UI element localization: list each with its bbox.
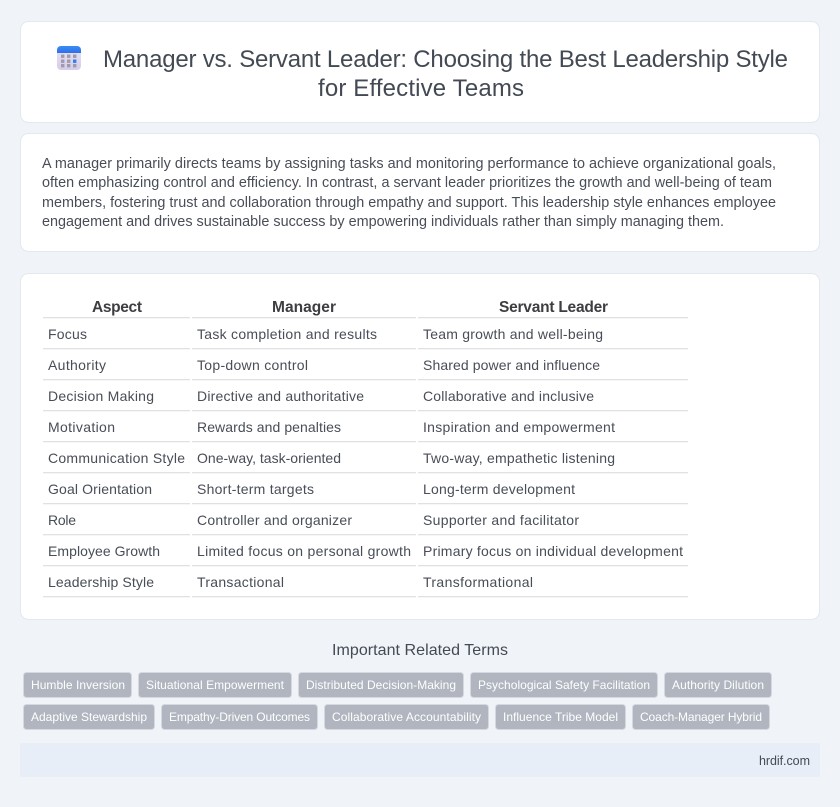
row: Leadership Style: [48, 574, 533, 590]
row: Goal Orientation: Short-term targets: [197, 481, 314, 497]
tags: related terms: [24, 672, 772, 730]
title: Manager vs. Servant Leader: Choosing the Best Leadership Style: [103, 46, 788, 73]
row: Goal Orientation: Goal Orientation: [48, 481, 152, 497]
panel: comparison table: [20, 274, 820, 620]
row: Role: Controller and organizer: [197, 512, 352, 528]
tag: [298, 672, 464, 698]
tag: [24, 672, 132, 698]
tag: Influence Tribe Model: [503, 710, 618, 724]
tag: Authority Dilution: [672, 678, 764, 692]
intro paragraph: engagement and drives sustainable success by empowering individuals rather than simply managing them.: [42, 214, 724, 230]
tag: Situational Empowerment: [146, 678, 285, 692]
intro paragraph: [42, 156, 776, 230]
row: Employee Growth: [48, 543, 683, 559]
row: Goal Orientation: Long-term development: [423, 481, 575, 497]
row: Authority: [48, 357, 600, 373]
row: Authority: Authority: [48, 357, 106, 373]
table header: Servant Leader: [499, 299, 608, 316]
row: Motivation: Rewards and penalties: [197, 419, 341, 435]
title: for Effective Teams: [318, 75, 524, 102]
tag: [138, 672, 292, 698]
row: Communication Style: One-way, task-oriented: [197, 450, 341, 466]
tag: [496, 704, 626, 730]
row: Communication Style: Communication Style: [48, 450, 185, 466]
title: [103, 46, 788, 102]
tag: Collaborative Accountability: [332, 710, 481, 724]
row: Focus: Team growth and well-being: [423, 326, 603, 342]
row: Decision Making: [48, 388, 594, 404]
row: Goal Orientation: [48, 481, 575, 497]
table header: Aspect: [92, 299, 142, 316]
heading: related terms: Important Related Terms: [332, 642, 508, 659]
tag: Psychological Safety Facilitation: [478, 678, 650, 692]
row: Authority: Top-down control: [197, 357, 308, 373]
intro paragraph: members, fostering trust and collaboration through empathy and support. This leadership style enhances employee: [42, 195, 776, 211]
row: Employee Growth: Primary focus on individual development: [423, 543, 683, 559]
tag: Adaptive Stewardship: [31, 710, 147, 724]
tag: [162, 704, 318, 730]
tag: Empathy-Driven Outcomes: [169, 710, 310, 724]
row: Leadership Style: Leadership Style: [48, 574, 154, 590]
row: Decision Making: Directive and authoritative: [197, 388, 364, 404]
tag: [324, 704, 488, 730]
row: Leadership Style: Transactional: [197, 574, 284, 590]
row: Role: Role: [48, 512, 76, 528]
tag: Distributed Decision-Making: [306, 678, 456, 692]
tag: Humble Inversion: [31, 678, 125, 692]
tag: [632, 704, 770, 730]
intro paragraph: often emphasizing control and efficiency. In contrast, a servant leader prioritizes the growth and well-being of team: [42, 175, 772, 191]
row: Communication Style: [48, 450, 615, 466]
footer: hrdif.com: [759, 754, 810, 768]
panel: title card: [20, 22, 820, 122]
tag: [470, 672, 658, 698]
row: Leadership Style: Transformational: [423, 574, 533, 590]
panel: intro text: [20, 134, 820, 252]
row: Decision Making: Collaborative and inclusive: [423, 388, 594, 404]
row: Employee Growth: Limited focus on personal growth: [197, 543, 411, 559]
row: Motivation: Motivation: [48, 419, 115, 435]
row: Decision Making: Decision Making: [48, 388, 154, 404]
row: Motivation: Inspiration and empowerment: [423, 419, 615, 435]
row: Focus: Focus: [48, 326, 87, 342]
tag: Coach-Manager Hybrid: [640, 710, 762, 724]
row: Employee Growth: Employee Growth: [48, 543, 160, 559]
row: Role: Supporter and facilitator: [423, 512, 579, 528]
row: Communication Style: Two-way, empathetic listening: [423, 450, 615, 466]
row: Authority: Shared power and influence: [423, 357, 600, 373]
icon: calendar: [57, 46, 81, 70]
row: Role: [48, 512, 579, 528]
row: Focus: Task completion and results: [197, 326, 377, 342]
row: Motivation: [48, 419, 615, 435]
table header: [92, 299, 608, 316]
tag: [24, 704, 154, 730]
row: Focus: [48, 326, 603, 342]
table header: Manager: [272, 299, 336, 316]
footer: [20, 743, 820, 777]
intro paragraph: A manager primarily directs teams by assigning tasks and monitoring performance to achieve organizational goals,: [42, 156, 776, 172]
tag: [664, 672, 772, 698]
